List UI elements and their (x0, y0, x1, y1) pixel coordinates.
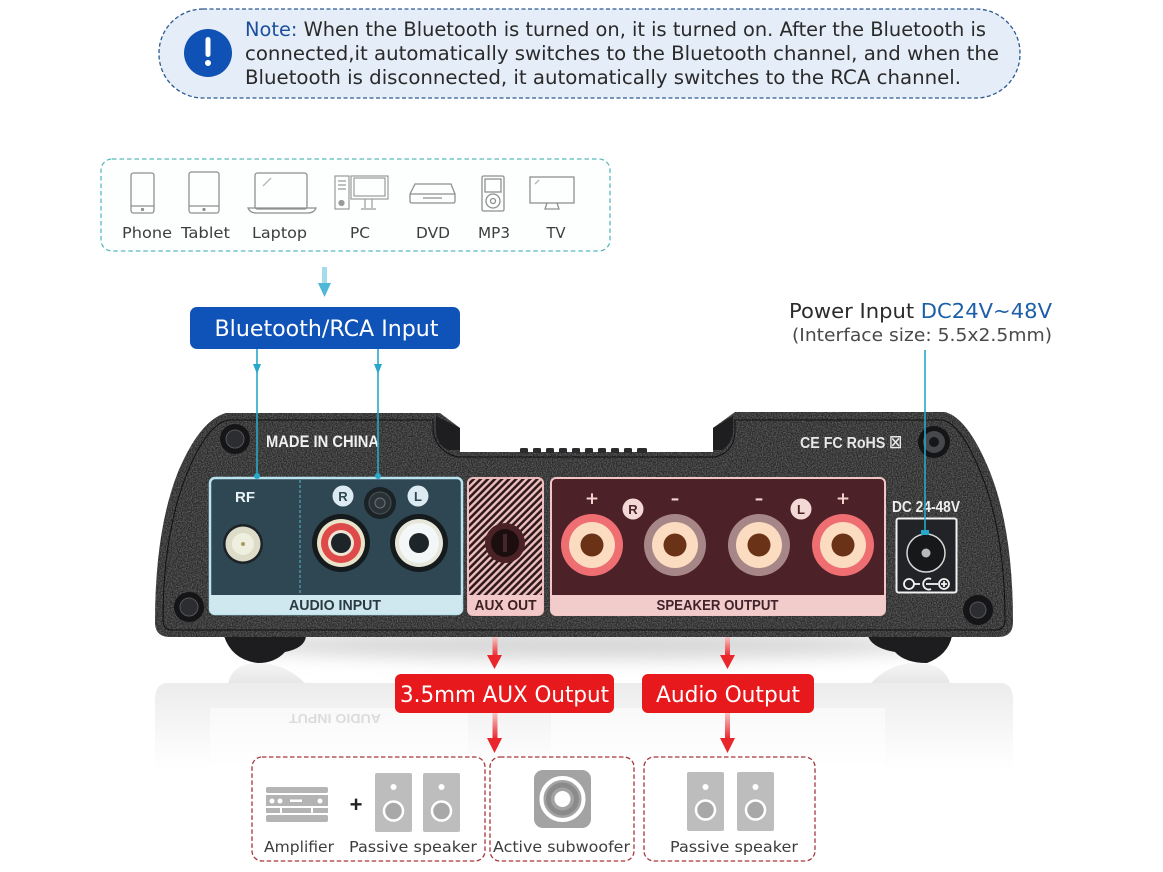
panel: speaker output (551, 478, 885, 615)
note text: connected,it automatically switches to the Bluetooth channel, and when the (245, 42, 999, 65)
callout: bluetooth note (159, 9, 1020, 98)
screw: bottom left (174, 592, 204, 622)
terminal: right minus (644, 514, 706, 576)
panel: audio input (210, 478, 462, 614)
L badge: L (414, 489, 422, 504)
floor shadow (240, 631, 930, 659)
floor reflection: AUDIO INPUT (289, 711, 381, 726)
polarity marks: – (671, 489, 679, 509)
terminal: right plus (561, 514, 623, 576)
icon: laptop (248, 173, 316, 213)
icon: desktop pc (335, 176, 388, 209)
notch shading right (713, 416, 733, 450)
made in china: MADE IN CHINA (266, 432, 379, 451)
note text: Note: When the Bluetooth is turned on, it is turned on. After the Bluetooth is (245, 18, 986, 41)
panel: aux out (468, 478, 543, 615)
screw: top right (918, 426, 950, 458)
certification marks: CE FC RoHS ☒ (800, 435, 902, 452)
label: audio output: Audio Output (656, 683, 800, 708)
panel: audio input: AUDIO INPUT (289, 597, 381, 614)
icon: speaker pair (375, 773, 460, 832)
terminal: left minus (728, 514, 790, 576)
panel: passive speaker (644, 757, 815, 861)
labels: Amplifier (264, 838, 335, 856)
icon: tv (530, 177, 574, 209)
device labels: MP3 (478, 224, 510, 242)
icon: mp3 player (482, 176, 504, 211)
dc power socket: DC 24-48V (892, 499, 961, 516)
icon: speaker pair (687, 772, 774, 831)
panel: active subwoofer (490, 757, 634, 861)
R badge: R (628, 502, 638, 517)
screw: top left (220, 424, 250, 454)
polarity marks: + (585, 489, 599, 509)
label: aux output (395, 674, 614, 713)
polarity symbol (904, 579, 949, 590)
polarity marks: – (755, 489, 763, 509)
device labels: PC (350, 224, 370, 242)
RCA white jack (390, 514, 448, 572)
note text: Bluetooth is disconnected, it automatically switches to the RCA channel. (245, 66, 961, 89)
plus sign: + (350, 792, 362, 817)
label: bluetooth rca input (190, 307, 460, 349)
labels: Passive speaker (349, 838, 478, 856)
device labels: Laptop (252, 224, 307, 242)
notch shading left (436, 416, 460, 450)
device labels: Phone (122, 224, 172, 242)
label: bluetooth rca input: Bluetooth/RCA Input (214, 317, 439, 342)
icon: dvd player (410, 184, 455, 203)
icon: subwoofer (534, 770, 591, 828)
label: aux output: 3.5mm AUX Output (400, 683, 609, 708)
panel: amplifier and passive speaker (252, 757, 485, 861)
panel: audio input: RF (235, 489, 255, 506)
L badge (408, 486, 428, 506)
icon: exclamation (184, 29, 232, 77)
R badge (622, 498, 644, 520)
vent ridge (520, 448, 647, 453)
icon: phone (131, 173, 154, 213)
device labels: Tablet (180, 224, 230, 242)
RCA red jack (312, 514, 370, 572)
arrow: speaker out (720, 637, 735, 669)
L badge (790, 498, 812, 520)
arrow: audio to speakers (720, 713, 735, 753)
label: Passive speaker (670, 838, 799, 856)
aux jack (485, 523, 525, 563)
R badge: R (338, 489, 348, 504)
panel: source devices (101, 159, 610, 251)
icon: amplifier (266, 787, 328, 822)
label: power input: Power Input DC24V~48V (789, 299, 1052, 323)
device rear panel (155, 412, 1013, 637)
labels (264, 838, 478, 856)
polarity marks (585, 489, 850, 509)
pairing button (364, 487, 396, 519)
label: audio output (642, 674, 814, 713)
rubber feet (224, 636, 952, 663)
polarity marks: + (836, 489, 850, 509)
L badge: L (797, 502, 805, 517)
connector line: power (921, 350, 929, 535)
connector lines: input (253, 349, 382, 479)
label: Active subwoofer (493, 838, 631, 856)
terminal: left plus (812, 514, 874, 576)
icon: tablet (189, 172, 219, 213)
R badge (332, 486, 354, 506)
RF connector (223, 524, 263, 564)
arrow: aux to subwoofer (487, 713, 502, 753)
panel: speaker output: SPEAKER OUTPUT (656, 597, 778, 614)
chassis (155, 412, 1013, 637)
arrow: aux out (487, 637, 502, 669)
dc power socket (892, 499, 961, 592)
screw: bottom right (963, 595, 993, 625)
label: power input: (Interface size: 5.5x2.5mm) (792, 325, 1052, 346)
device labels: DVD (416, 224, 450, 242)
note text (245, 18, 999, 89)
device labels (122, 224, 566, 242)
label: power input (789, 299, 1052, 346)
floor reflection (155, 663, 1013, 770)
device labels: TV (546, 224, 566, 242)
panel: aux out: AUX OUT (474, 597, 536, 614)
arrow: devices to input (318, 267, 331, 297)
